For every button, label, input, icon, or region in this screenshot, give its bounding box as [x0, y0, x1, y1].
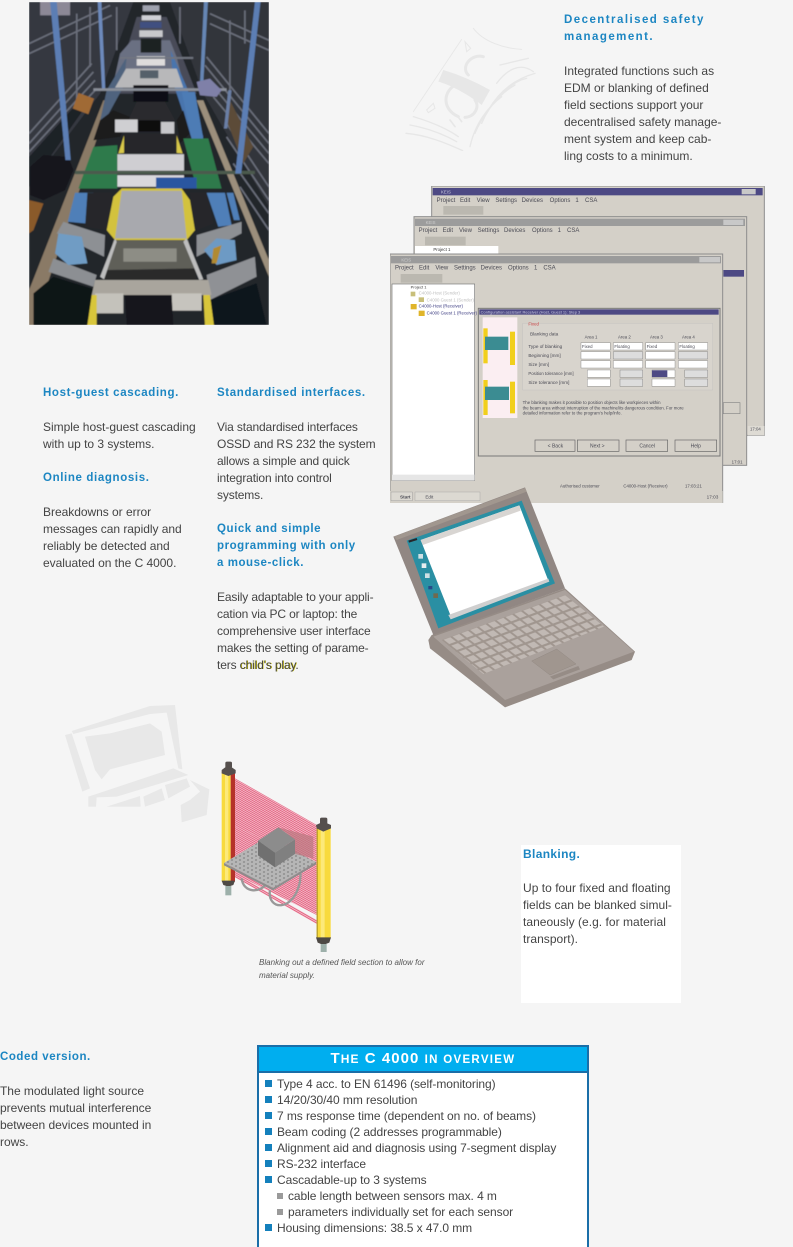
configuration dialog: Fixed [582, 344, 593, 349]
text: decentralised safety management: field sections support your [564, 98, 703, 112]
caption: blanking illustration: material supply. [259, 970, 315, 980]
front window: CSA [543, 266, 556, 272]
list item: RS-232 interface [277, 1157, 366, 1171]
heading: quick and simple programming [217, 523, 356, 569]
text: blanking: fields can be blanked simul- [523, 898, 672, 912]
software screenshots: stacked windows [390, 186, 765, 503]
illustration: light curtain with blanked field [222, 762, 331, 952]
configuration dialog [478, 308, 720, 456]
middle window: 17:01 [732, 459, 743, 464]
text: blanking: transport). [523, 932, 578, 946]
text: standardised interfaces: OSSD and RS 232 the system [217, 437, 375, 451]
heading: blanking: Blanking. [523, 847, 580, 861]
configuration dialog: Area 2 [618, 335, 631, 340]
text: blanking: taneously (e.g. for material [523, 915, 666, 929]
middle window: Edit [443, 228, 453, 234]
configuration dialog: Fixed [647, 344, 658, 349]
photo: car assembly line [29, 2, 269, 325]
back window: CSA [585, 198, 597, 204]
text: blanking: Up to four fixed and floating [523, 881, 671, 895]
text: host-guest cascading: with up to 3 systems. [43, 437, 154, 451]
text: coded version: between devices mounted in [0, 1118, 151, 1132]
text: online diagnosis: messages can rapidly and [43, 522, 182, 536]
heading: online diagnosis: Online diagnosis. [43, 472, 150, 484]
text: standardised interfaces [217, 420, 375, 502]
middle window: 1 [558, 228, 562, 234]
icon: ghosted banknote watermark [406, 28, 536, 151]
illustration: laptop [393, 488, 635, 708]
panel header: THE C 4000 IN OVERVIEW [331, 1050, 515, 1067]
text: decentralised safety management [564, 64, 721, 163]
front window: Edit [419, 266, 430, 272]
configuration dialog: Help [691, 443, 701, 449]
text: decentralised safety management: EDM or blanking of defined [564, 81, 709, 95]
text: quick and simple programming [217, 590, 374, 672]
text: blanking [523, 881, 672, 946]
middle window: KEIS [426, 220, 436, 225]
front window: Options [508, 266, 529, 272]
configuration dialog: Size tolerance [mm] [528, 380, 569, 385]
front window: Project 1 [411, 284, 427, 289]
heading: host-guest cascading: Host-guest cascading. [43, 387, 179, 399]
configuration dialog: Floating [679, 344, 695, 349]
text: quick and simple programming: ters child's play. [217, 658, 299, 672]
text: host-guest cascading: Simple host-guest cascading [43, 420, 196, 434]
panel header [259, 1047, 587, 1073]
configuration dialog: Type of blanking [528, 344, 563, 349]
back window: 1 [575, 198, 579, 204]
heading: decentralised safety management [564, 14, 705, 43]
configuration dialog: the beam area without interruption of the machine/its dangerous condition. For more [523, 405, 684, 410]
text: quick and simple programming: comprehensive user interface [217, 624, 370, 638]
configuration dialog: Area 1 [585, 335, 598, 340]
front window: C4000-Host (Sender) [419, 291, 460, 296]
front window: Edit [425, 494, 434, 499]
text: online diagnosis: evaluated on the C 4000. [43, 556, 176, 570]
heading: decentralised safety management: Decentralised safety [564, 14, 705, 26]
list item: Alignment aid and diagnosis using 7-segment display [277, 1141, 556, 1155]
text: quick and simple programming: Easily adaptable to your appli- [217, 590, 373, 604]
text: coded version: prevents mutual interference [0, 1101, 151, 1115]
front window: Project [395, 266, 414, 272]
configuration dialog: Floating [614, 344, 630, 349]
configuration dialog: Position tolerance [mm] [528, 371, 574, 376]
back window: KEIS [441, 190, 451, 195]
front window: Devices [481, 266, 502, 272]
configuration dialog: Fixed [528, 322, 540, 327]
front window: View [435, 266, 449, 272]
heading: decentralised safety management: management. [564, 31, 654, 43]
front window: KEIS [401, 258, 411, 263]
back window: Options [550, 198, 570, 204]
front window: Authorised customer [560, 483, 600, 488]
text: decentralised safety management: ment system and keep cab- [564, 132, 711, 146]
back window [432, 186, 764, 435]
middle window: Devices [504, 228, 525, 234]
front window [390, 254, 723, 503]
back window: View [477, 198, 490, 204]
front window: C4000-Host (Receiver) [419, 304, 463, 309]
back window: Edit [460, 198, 471, 204]
heading: quick and simple programming: Quick and simple [217, 523, 321, 535]
configuration dialog: Size [mm] [528, 362, 549, 367]
text: coded version: rows. [0, 1135, 29, 1149]
back window: Project [437, 198, 456, 204]
heading: standardised interfaces: Standardised interfaces. [217, 387, 366, 399]
text: standardised interfaces: Via standardised interfaces [217, 420, 358, 434]
front window: Settings [454, 266, 476, 272]
middle window: Options [532, 228, 553, 234]
configuration dialog: The blanking makes it possible to position objects like workpieces within [523, 400, 661, 405]
text: online diagnosis: reliably be detected and [43, 539, 170, 553]
configuration dialog: detailed information refer to the program's help/info. [523, 411, 622, 416]
configuration dialog: Beginning [mm] [528, 353, 561, 358]
panel: blanking [521, 845, 681, 1003]
text: standardised interfaces: systems. [217, 488, 263, 502]
front window: 17:03:21 [685, 483, 702, 488]
middle window: View [459, 228, 473, 234]
heading: quick and simple programming: a mouse-click. [217, 557, 304, 569]
heading: quick and simple programming: programming with only [217, 540, 356, 552]
list item: Beam coding (2 addresses programmable) [277, 1125, 502, 1139]
feature list [265, 1077, 556, 1235]
back window: Devices [522, 198, 543, 204]
back window: Settings [495, 198, 517, 204]
list item: 7 ms response time (dependent on no. of beams) [277, 1109, 536, 1123]
text: standardised interfaces: allows a simple and quick [217, 454, 350, 468]
configuration dialog: Area 4 [682, 335, 695, 340]
text: standardised interfaces: integration into control [217, 471, 332, 485]
front window: 1 [534, 266, 538, 272]
back window: 17:04 [750, 427, 761, 432]
caption: blanking illustration: Blanking out a defined field section to allow for [259, 958, 425, 967]
configuration dialog: Cancel [639, 443, 655, 449]
text: decentralised safety management: decentralised safety manage- [564, 115, 721, 129]
front window: C4000 Guest 1 (Receiver) [427, 310, 478, 315]
text: online diagnosis [43, 505, 182, 570]
list item: Type 4 acc. to EN 61496 (self-monitoring) [277, 1077, 496, 1091]
text: online diagnosis: Breakdowns or error [43, 505, 151, 519]
text: coded version: The modulated light source [0, 1084, 144, 1098]
caption: blanking illustration [259, 958, 425, 980]
configuration dialog: Configuration assistant Receiver (Host, Guest 1): Step 3 [481, 310, 581, 315]
configuration dialog: < Back [548, 443, 564, 449]
middle window: Project 1 [433, 247, 451, 252]
configuration dialog: Next > [590, 443, 605, 449]
list item: Housing dimensions: 38.5 x 47.0 mm [277, 1221, 472, 1235]
configuration dialog: Area 3 [650, 335, 663, 340]
text: quick and simple programming: makes the setting of parame- [217, 641, 368, 655]
sub list item: cable length between sensors max. 4 m [288, 1189, 497, 1203]
middle window: Project [419, 228, 438, 234]
icon: ghosted laptop watermark [65, 705, 209, 822]
front window: 17:03 [707, 494, 719, 499]
text: host-guest cascading [43, 420, 196, 451]
list item: Cascadable-up to 3 systems [277, 1173, 427, 1187]
front window: Start [400, 494, 411, 499]
text: quick and simple programming: cation via PC or laptop: the [217, 607, 357, 621]
list item: 14/20/30/40 mm resolution [277, 1093, 417, 1107]
middle window [414, 217, 747, 465]
text: decentralised safety management: Integrated functions such as [564, 64, 714, 78]
front window: C4000-Host (Receiver) [623, 483, 668, 488]
panel: the C 4000 in overview [257, 1045, 589, 1247]
middle window: CSA [567, 228, 579, 234]
front window: C4000 Guest 1 (Sender) [427, 297, 474, 302]
sub list item: parameters individually set for each sensor [288, 1205, 513, 1219]
configuration dialog: Blanking data [530, 331, 559, 336]
heading: coded version: Coded version. [0, 1051, 91, 1063]
text: decentralised safety management: ling costs to a minimum. [564, 149, 693, 163]
text: coded version [0, 1084, 151, 1149]
middle window: Settings [478, 228, 499, 234]
